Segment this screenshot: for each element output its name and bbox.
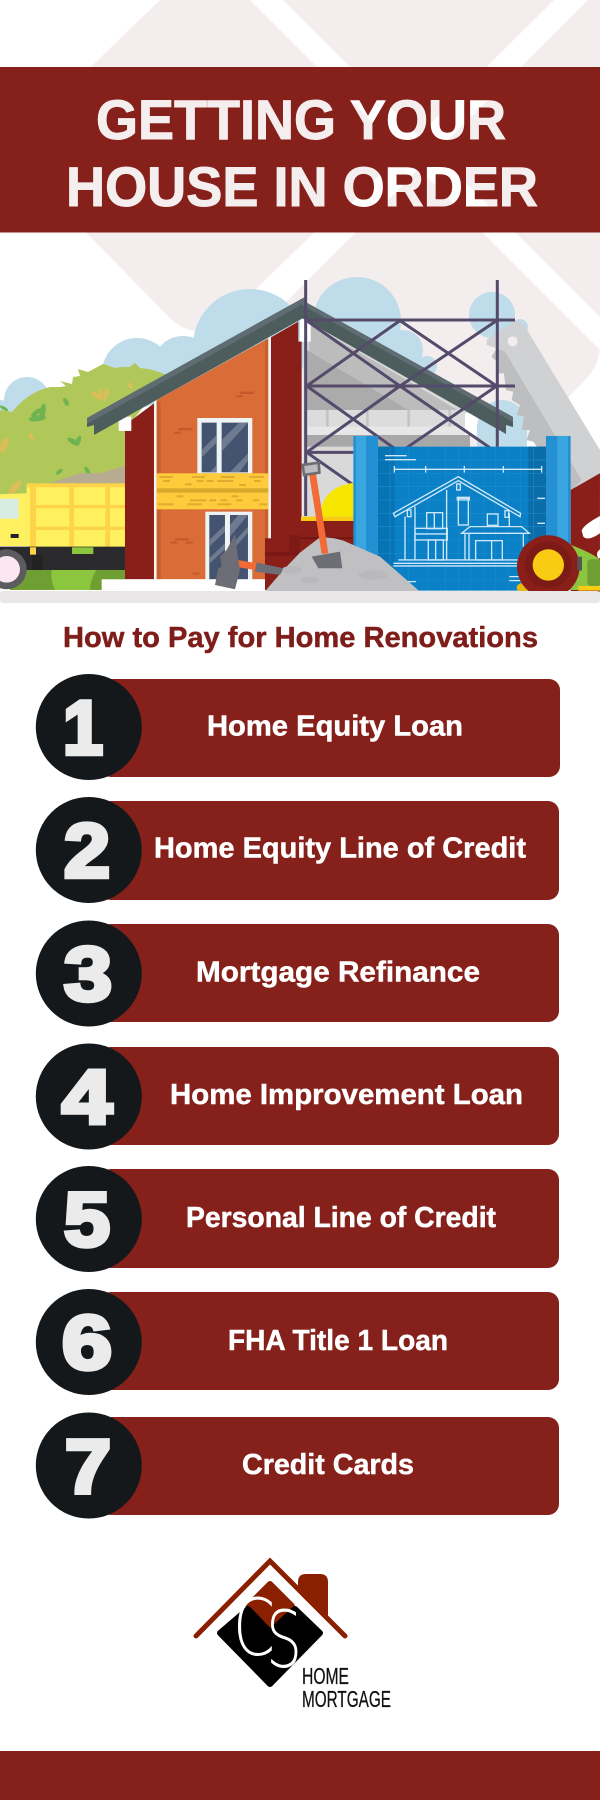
title banner — [0, 67, 600, 232]
logo monogram — [233, 1584, 302, 1686]
logo wordmark: HOME — [302, 1663, 349, 1689]
blueprint — [353, 436, 571, 591]
roof — [87, 297, 513, 435]
item 6: FHA Title 1 Loan: FHA Title 1 Loan — [228, 1325, 448, 1357]
upper window — [197, 418, 252, 473]
logo monogram: C — [233, 1584, 275, 1674]
logo chimney — [298, 1574, 328, 1620]
logo: CS Home Mortgage — [196, 1561, 391, 1712]
section heading: How to Pay for Home Renovations — [63, 622, 538, 654]
saw — [487, 320, 600, 493]
item 1: Home Equity Loan — [36, 674, 560, 780]
item 6: FHA Title 1 Loan — [36, 1289, 559, 1395]
logo roof — [196, 1561, 345, 1636]
title text: HOUSE IN ORDER — [66, 155, 538, 218]
logo diamond — [220, 1584, 320, 1684]
item 4: Home Improvement Loan: Home Improvement Loan — [170, 1079, 523, 1111]
item 7: Credit Cards: Credit Cards — [242, 1449, 414, 1481]
ground strip — [0, 591, 600, 603]
illustration: construction scene — [0, 277, 600, 598]
unfinished wing of house — [300, 319, 477, 516]
blueprint house drawing — [385, 456, 545, 582]
door — [205, 512, 252, 580]
brick marks — [171, 392, 254, 575]
house front — [102, 322, 303, 590]
dump truck — [0, 483, 125, 589]
title text: GETTING YOUR — [96, 88, 506, 151]
logo wordmark: MORTGAGE — [302, 1686, 391, 1712]
item 5: Personal Line of Credit: 5 — [64, 1178, 110, 1263]
measuring tape — [516, 535, 582, 591]
item 1: Home Equity Loan: Home Equity Loan — [207, 710, 463, 742]
item 3: Mortgage Refinance: 3 — [64, 932, 112, 1017]
item 2: Home Equity Line of Credit: Home Equity Line of Credit — [154, 832, 526, 864]
background pattern — [5, 0, 600, 520]
title text — [66, 88, 538, 218]
scaffolding — [306, 280, 515, 516]
blueprint rolls — [353, 436, 571, 589]
item 4: Home Improvement Loan: 4 — [62, 1055, 112, 1140]
logo wordmark — [302, 1663, 391, 1712]
gravel and ground behind truck — [10, 466, 125, 590]
bush with leaves — [0, 363, 168, 500]
item 3: Mortgage Refinance: Mortgage Refinance — [196, 956, 480, 988]
item 2: Home Equity Line of Credit — [36, 797, 559, 903]
gravel pile — [263, 537, 420, 593]
item 3: Mortgage Refinance — [36, 920, 559, 1026]
item 2: Home Equity Line of Credit: 2 — [64, 809, 110, 894]
item 1: Home Equity Loan: 1 — [63, 686, 103, 771]
item 5: Personal Line of Credit: Personal Line of Credit — [186, 1202, 496, 1234]
item 5: Personal Line of Credit — [36, 1166, 559, 1272]
item 7: Credit Cards: 7 — [65, 1425, 111, 1510]
item 4: Home Improvement Loan — [36, 1044, 559, 1150]
item 6: FHA Title 1 Loan: 6 — [62, 1301, 112, 1386]
clouds — [0, 277, 528, 447]
shovel — [303, 463, 342, 568]
item 7: Credit Cards — [36, 1412, 559, 1518]
footer band — [0, 1751, 600, 1800]
yellow band — [157, 473, 268, 509]
logo monogram: S — [266, 1596, 302, 1686]
saw handle — [567, 473, 600, 592]
hard hat — [300, 483, 355, 554]
hammer — [215, 534, 283, 589]
